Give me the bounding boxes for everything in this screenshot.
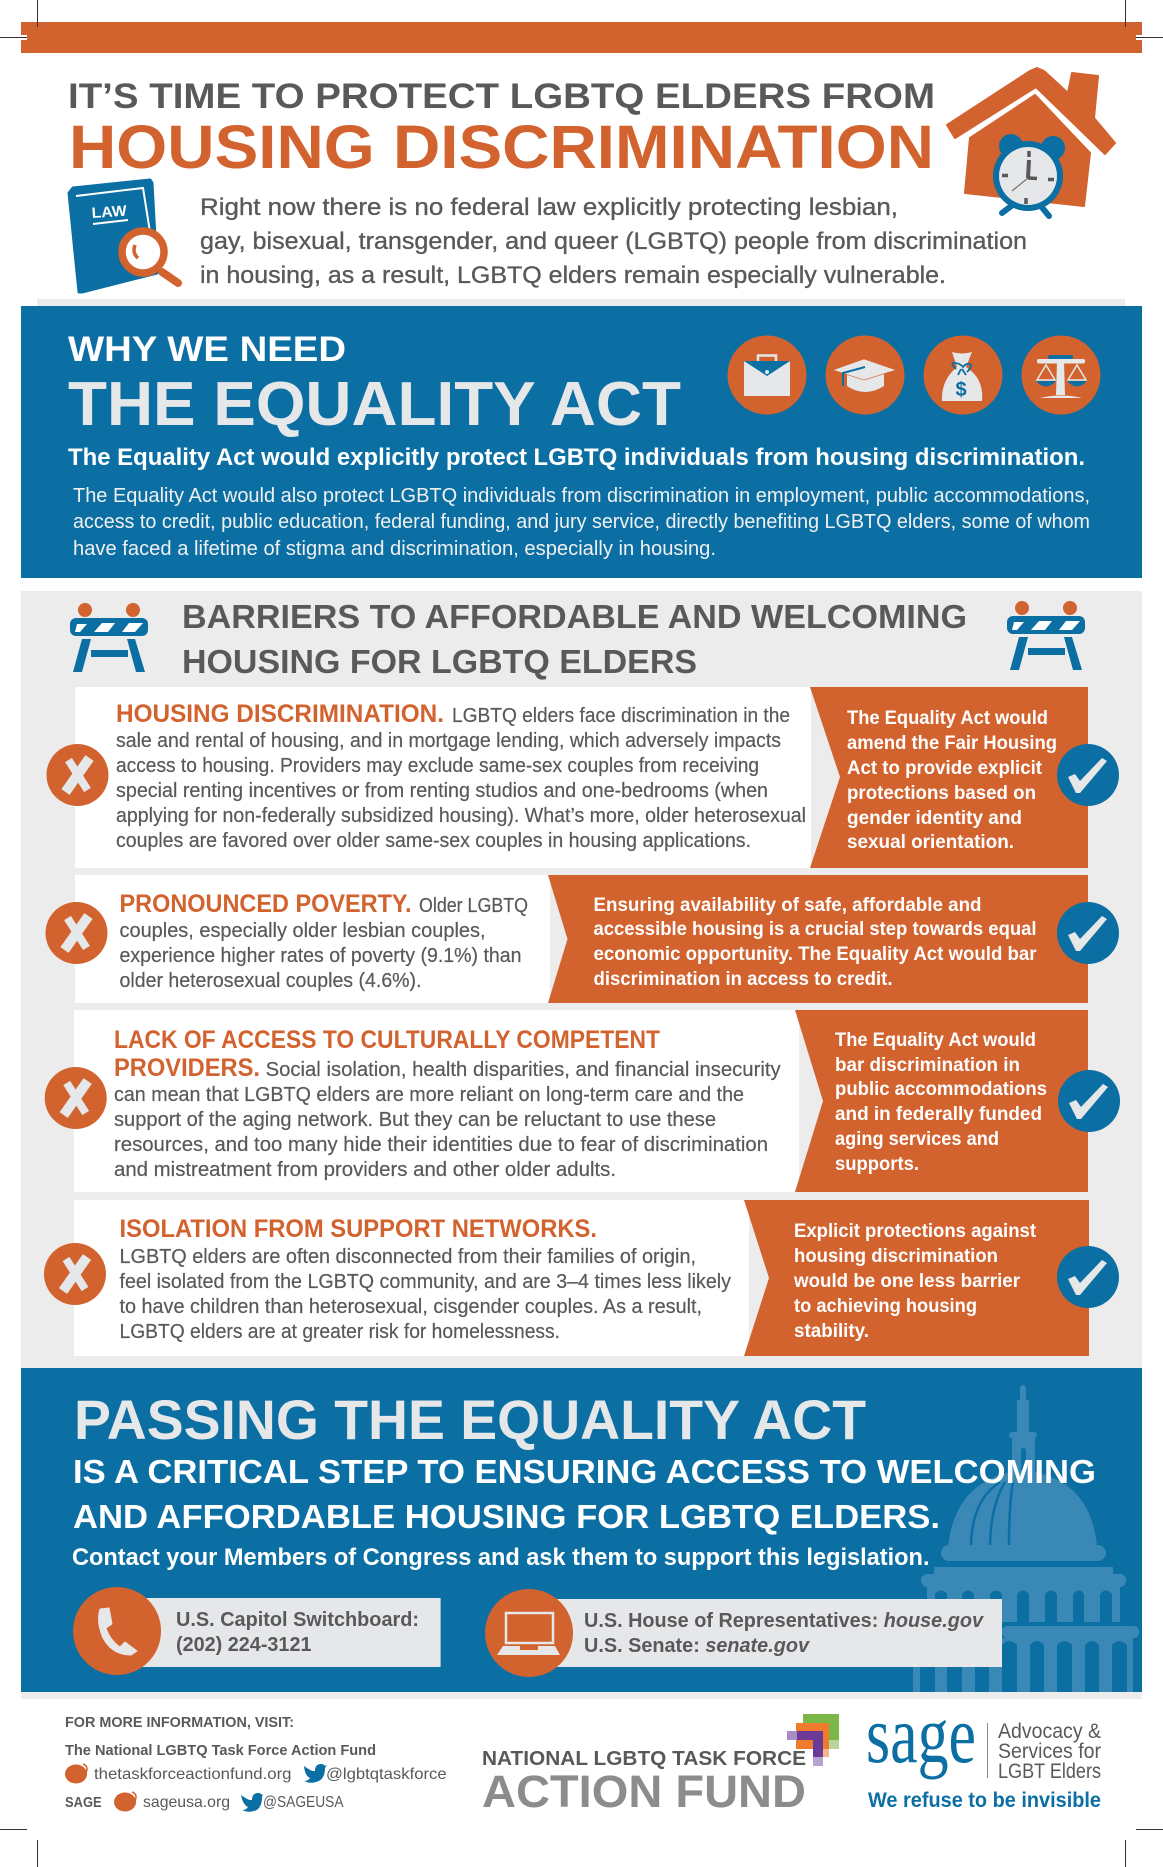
solution text: Ensuring availability of safe, affordable and <box>594 894 982 916</box>
solution text: protections based on <box>847 782 1036 804</box>
barrier text: feel isolated from the LGBTQ community, and are 3–4 times less likely <box>120 1271 731 1293</box>
title: IT’S TIME TO PROTECT LGBTQ ELDERS FROM <box>68 77 935 116</box>
icon: laptop <box>485 1589 573 1677</box>
footer: more information: @lgbtqtaskforce <box>326 1766 447 1783</box>
solution text <box>594 894 1037 990</box>
barrier text: sale and rental of housing, and in mortgage lending, which adversely impacts <box>116 730 781 752</box>
barrier text <box>114 1026 781 1181</box>
solution text: Act to provide explicit <box>847 757 1042 779</box>
footer: more information <box>65 1714 447 1812</box>
icon: twitter <box>241 1793 263 1812</box>
solution text: and in federally funded <box>835 1103 1042 1125</box>
heading: why we need: WHY WE NEED <box>68 330 346 369</box>
solution text: sexual orientation. <box>847 831 1014 853</box>
subheading: IS A CRITICAL STEP TO ENSURING ACCESS TO WELCOMING <box>73 1453 1096 1490</box>
capitol dome ribs and column slots <box>920 1482 1127 1692</box>
heading: passing the equality act: PASSING THE EQUALITY ACT <box>74 1388 866 1451</box>
contact: websites <box>485 1589 1002 1677</box>
solution text: economic opportunity. The Equality Act would bar <box>594 943 1037 965</box>
barrier text: LGBTQ elders are at greater risk for homelessness. <box>120 1321 560 1343</box>
intro paragraph <box>200 194 1027 289</box>
icon: x mark <box>46 744 108 806</box>
capitol silhouette <box>913 1385 1139 1692</box>
barrier text: applying for non-federally subsidized housing). What’s more, older heterosexual <box>116 805 806 827</box>
barrier text: HOUSING DISCRIMINATION. <box>116 700 444 728</box>
panel: barriers background <box>21 591 1142 1371</box>
icon: x mark <box>46 902 108 964</box>
icon: x mark <box>44 1243 106 1305</box>
barrier text: Older LGBTQ <box>419 895 528 917</box>
icon: money bag: $ <box>956 379 967 401</box>
icon: barrier left <box>70 603 148 672</box>
solution text: public accommodations <box>835 1078 1047 1100</box>
barrier text: resources, and too many hide their identities due to fear of discrimination <box>114 1134 768 1156</box>
solution text: aging services and <box>835 1128 999 1150</box>
intro paragraph: in housing, as a result, LGBTQ elders remain especially vulnerable. <box>200 262 946 289</box>
solution text <box>793 1220 1036 1342</box>
top orange banner <box>21 22 1142 53</box>
bold statement: The Equality Act would explicitly protect LGBTQ individuals from housing discrimination. <box>68 444 1085 471</box>
barrier text: LGBTQ elders face discrimination in the <box>452 705 790 727</box>
barrier text: and mistreatment from providers and other older adults. <box>114 1159 616 1181</box>
barrier text <box>120 1215 731 1343</box>
body paragraph: access to credit, public education, federal funding, and jury service, directly benefiting LGBTQ elders, some of whom <box>73 511 1090 533</box>
barrier text: PROVIDERS. <box>114 1054 260 1082</box>
heading: barriers: HOUSING FOR LGBTQ ELDERS <box>182 643 697 680</box>
intro paragraph: Right now there is no federal law explicitly protecting lesbian, <box>200 194 898 221</box>
barrier text: ISOLATION FROM SUPPORT NETWORKS. <box>120 1215 597 1243</box>
panel: passing the equality act <box>21 1368 1142 1692</box>
icon: phone <box>73 1587 161 1675</box>
contact: capitol switchboard <box>73 1587 441 1675</box>
icon: law book with magnifier <box>69 180 178 292</box>
grey strip below panel <box>21 1692 1142 1699</box>
icon: check mark <box>1057 744 1119 806</box>
barrier text: older heterosexual couples (4.6%). <box>120 970 422 992</box>
logo: national lgbtq task force action fund <box>482 1714 839 1817</box>
barrier text: couples, especially older lesbian couples, <box>120 920 486 942</box>
icon: money bag <box>924 336 1002 414</box>
footer: more information: @SAGEUSA <box>263 1794 344 1811</box>
row: isolation from support networks <box>44 1200 1119 1356</box>
logo: national lgbtq task force action fund: ACTION FUND <box>482 1766 806 1817</box>
heading: barriers: BARRIERS TO AFFORDABLE AND WELCOMING <box>182 598 967 635</box>
contact: capitol switchboard: (202) 224-3121 <box>176 1634 312 1656</box>
logo: sage: LGBT Elders <box>998 1760 1101 1783</box>
icon: check mark <box>1057 902 1119 964</box>
logo: sage: We refuse to be invisible <box>868 1789 1101 1812</box>
barrier text: access to housing. Providers may exclude same-sex couples from receiving <box>116 755 759 777</box>
row: pronounced poverty <box>46 875 1119 1003</box>
barrier text: to have children than heterosexual, cisgender couples. As a result, <box>120 1296 702 1318</box>
title: HOUSING DISCRIMINATION <box>69 113 934 181</box>
logo: sage: Advocacy & <box>998 1720 1101 1743</box>
solution text: gender identity and <box>847 807 1022 829</box>
solution text: to achieving housing <box>794 1295 977 1317</box>
footer: more information: FOR MORE INFORMATION, VISIT: <box>65 1714 294 1731</box>
grey strip above equality panel <box>37 299 1125 307</box>
barrier text <box>116 700 806 852</box>
title <box>68 77 935 181</box>
barrier text: support of the aging network. But they can be reluctant to use these <box>114 1109 716 1131</box>
barrier text: Social isolation, health disparities, and financial insecurity <box>266 1059 781 1081</box>
barrier text: special renting incentives or from renting studios and one-bedrooms (when <box>116 780 768 802</box>
solution text: amend the Fair Housing <box>847 732 1057 754</box>
icon: scales <box>1022 336 1100 414</box>
body paragraph: have faced a lifetime of stigma and discrimination, especially in housing. <box>73 538 716 560</box>
logo: sage <box>866 1689 1101 1812</box>
logo: sage: Services for <box>998 1740 1101 1763</box>
solution text: discrimination in access to credit. <box>594 968 892 990</box>
barrier text: experience higher rates of poverty (9.1%) than <box>120 945 522 967</box>
solution text: The Equality Act would <box>835 1029 1036 1051</box>
solution text: housing discrimination <box>794 1245 998 1267</box>
subheading: AND AFFORDABLE HOUSING FOR LGBTQ ELDERS. <box>73 1498 940 1535</box>
footer: more information: sageusa.org <box>143 1794 230 1811</box>
heading: the equality act: THE EQUALITY ACT <box>68 370 681 439</box>
heading: barriers <box>182 598 967 680</box>
solution text: accessible housing is a crucial step towards equal <box>594 918 1036 940</box>
row: culturally competent providers <box>45 1010 1120 1192</box>
contact: websites: U.S. House of Representatives: house.gov <box>584 1610 985 1632</box>
solution text <box>847 707 1057 853</box>
solution text: supports. <box>835 1153 919 1175</box>
icon: law book with magnifier: LAW <box>91 203 128 222</box>
footer: more information: SAGE <box>65 1794 102 1811</box>
barrier text <box>120 890 528 992</box>
barrier text: can mean that LGBTQ elders are more reliant on long-term care and the <box>114 1084 744 1106</box>
solution text: bar discrimination in <box>835 1054 1020 1076</box>
body paragraph <box>73 485 1090 560</box>
icon: graduation cap <box>826 336 904 414</box>
footer: more information: The National LGBTQ Task Force Action Fund <box>65 1742 376 1759</box>
contact: websites: U.S. Senate: senate.gov <box>584 1635 811 1657</box>
barrier text: PRONOUNCED POVERTY. <box>120 890 412 918</box>
icon: house with clock <box>947 68 1115 216</box>
row: housing discrimination <box>46 687 1119 868</box>
solution text <box>835 1029 1047 1175</box>
barrier text: LGBTQ elders are often disconnected from their families of origin, <box>120 1246 696 1268</box>
icon: briefcase <box>728 336 806 414</box>
body paragraph: The Equality Act would also protect LGBTQ individuals from discrimination in employment, public accommodations, <box>73 485 1090 507</box>
call to action: Contact your Members of Congress and ask them to support this legislation. <box>72 1544 930 1571</box>
logo: sage: sage <box>866 1689 976 1780</box>
solution text: Explicit protections against <box>794 1220 1036 1242</box>
logo: national lgbtq task force action fund: NATIONAL LGBTQ TASK FORCE <box>482 1748 806 1770</box>
intro paragraph: gay, bisexual, transgender, and queer (LGBTQ) people from discrimination <box>200 228 1027 255</box>
icon: web link <box>65 1764 87 1784</box>
panel: why we need the equality act <box>21 306 1142 578</box>
icon: x mark <box>45 1067 107 1129</box>
icon: check mark <box>1057 1246 1119 1308</box>
subheading <box>73 1453 1096 1535</box>
icon: check mark <box>1058 1070 1120 1132</box>
solution text: would be one less barrier <box>793 1270 1020 1292</box>
icon: twitter <box>304 1764 327 1783</box>
icon: web link <box>114 1792 136 1812</box>
solution text: The Equality Act would <box>847 707 1048 729</box>
solution text: stability. <box>794 1320 869 1342</box>
barrier text: LACK OF ACCESS TO CULTURALLY COMPETENT <box>114 1026 660 1054</box>
icon: barrier right <box>1007 601 1085 670</box>
footer: more information: thetaskforceactionfund.org <box>94 1766 292 1783</box>
contact: capitol switchboard: U.S. Capitol Switchboard: <box>176 1609 419 1631</box>
barrier text: couples are favored over older same-sex couples in housing applications. <box>116 830 751 852</box>
